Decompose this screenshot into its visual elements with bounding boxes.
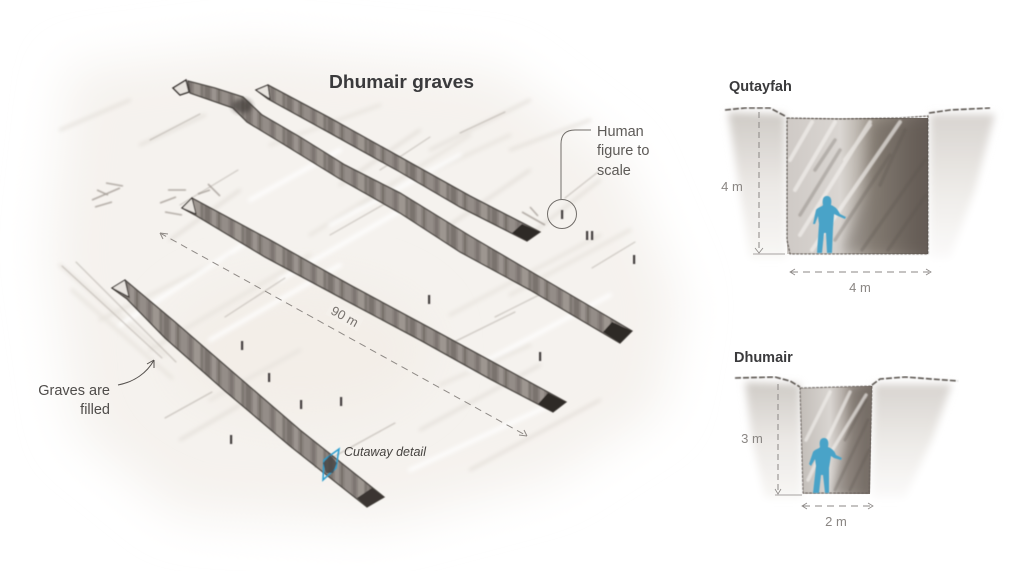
annotation: human figure to scale: Human <box>597 124 644 140</box>
dimension: Qutayfah width 4 m: 4 m <box>849 280 871 295</box>
cross-section heading: Dhumair: Dhumair <box>734 350 793 366</box>
cross-section heading: Qutayfah: Qutayfah <box>729 79 792 95</box>
annotation: graves are filled <box>38 360 154 418</box>
dimension: Qutayfah width 4 m <box>790 269 931 295</box>
human scale figures <box>230 210 635 444</box>
annotation: graves are filled: filled <box>80 402 110 418</box>
cutaway marker <box>323 449 339 480</box>
grave trench 4: lower left <box>112 280 384 507</box>
grave trench 1: long bent <box>173 80 632 343</box>
dimension: Dhumair width 2 m <box>802 503 873 529</box>
dimension: Qutayfah height 4 m: 4 m <box>721 179 743 194</box>
cross-section: Qutayfah pit <box>725 108 995 258</box>
title: Dhumair graves <box>329 72 474 92</box>
distance marker: 90 m <box>160 233 527 436</box>
dimension: Qutayfah height 4 m <box>721 112 785 254</box>
terrain background <box>50 48 680 525</box>
annotation: human figure to scale: scale <box>597 163 631 179</box>
disturbed ground patch <box>92 183 545 225</box>
annotation: cutaway detail: Cutaway detail <box>344 445 427 459</box>
grave trench 3: middle <box>182 198 566 412</box>
dimension: Dhumair width 2 m: 2 m <box>825 514 847 529</box>
annotation: human figure to scale: figure to <box>597 143 649 159</box>
cross-section: Dhumair pit <box>735 377 958 498</box>
annotation: graves are filled: Graves are <box>38 383 110 399</box>
figure: Dhumair blue human <box>809 438 842 493</box>
annotation: human figure to scale <box>548 124 649 228</box>
grave trench 2: upper short <box>256 85 540 241</box>
dimension: Dhumair height 3 m: 3 m <box>741 431 763 446</box>
dimension: Dhumair height 3 m <box>741 384 802 495</box>
distance marker: 90 m: 90 m <box>328 303 361 330</box>
figure: Qutayfah blue human <box>813 196 846 253</box>
